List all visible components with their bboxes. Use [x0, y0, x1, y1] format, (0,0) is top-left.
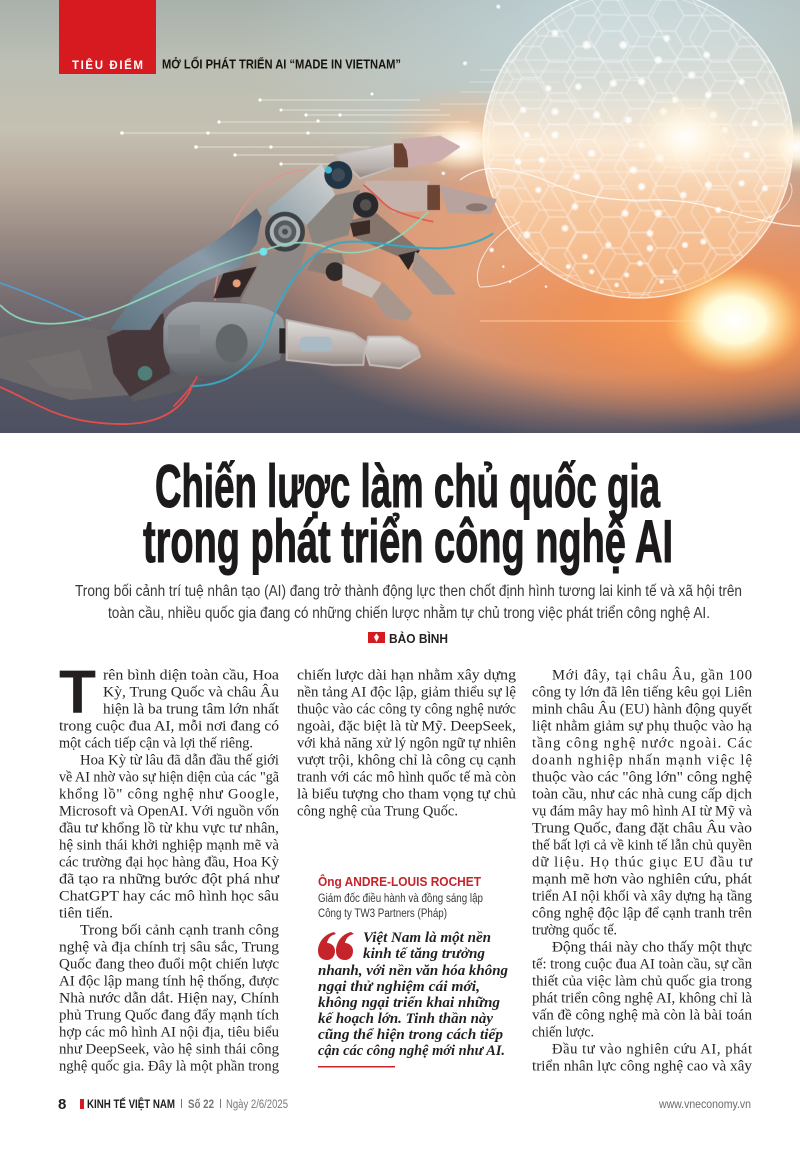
icon: quotation marks — [318, 932, 354, 960]
article column 1: khổng lồ" công nghệ như Google, — [59, 786, 279, 802]
article column 2: nền tảng AI độc lập, giảm thiểu sự lệ — [297, 684, 516, 700]
article column 1: AI độc lập mang tính hệ thống, được — [59, 974, 280, 990]
article column 3: tầng công nghệ nước ngoài. Các — [532, 736, 753, 752]
article column 1: đã tạo ra những bước đột phá như — [59, 872, 280, 888]
article column 3: mạnh mẽ hơn vào nghiên cứu, phát — [532, 872, 752, 888]
article column 3: vụ đám mây hay mô hình AI từ Mỹ và — [532, 804, 753, 820]
pull quote: Andre-Louis Rochet — [318, 874, 508, 1068]
article column 2: vượt trội, không chỉ là công cụ cạnh — [297, 752, 517, 768]
palm connector — [307, 190, 360, 245]
byline: BẢO BÌNH — [389, 631, 448, 646]
article column 3: Động thái này cho thấy một thực — [552, 940, 753, 956]
article column 1: Nhà nước dẫn dắt. Hiện nay, Chính — [59, 990, 280, 1006]
article column 3: công nghệ độc lập để cạnh tranh trên — [532, 906, 753, 922]
article column 2 — [297, 668, 517, 820]
issue number: Số 22 — [188, 1099, 214, 1111]
digital sphere — [441, 0, 800, 305]
article column 2: ngoài, đặc biệt là từ Mỹ. DeepSeek, — [297, 718, 516, 734]
quote text: cũng thể hiện trong cách tiếp — [318, 1027, 503, 1043]
standfirst: toàn cầu, nhiều quốc gia đang có những chiến lược nhằm tự chủ trong việc phát triển công nghệ AI. — [108, 605, 710, 622]
circuit lines leading to the sphere — [122, 70, 560, 164]
issue date: Ngày 2/6/2025 — [226, 1099, 288, 1111]
article column 2: thuộc vào các công ty công nghệ nước — [297, 702, 517, 718]
background wires — [0, 170, 306, 424]
quote text: kế hoạch lớn. Tinh thần này — [318, 1011, 493, 1027]
article column 2: với khả năng xử lý ngôn ngữ tự nhiên — [297, 736, 517, 752]
article column 3: tế: trong cuộc đua AI toàn cầu, sự cần — [532, 956, 753, 972]
speaker role: Giám đốc điều hành và đồng sáng lập — [318, 893, 483, 905]
article column 3 — [532, 666, 753, 1074]
quote text — [318, 930, 508, 1059]
article column 3: toàn cầu, như các nhà cung cấp dịch — [532, 786, 753, 802]
article column 1: ChatGPT hay các mô hình học sâu — [59, 888, 280, 904]
thumb — [130, 376, 196, 401]
article column 1: về AI nhờ vào sự hiện diện của các "gã — [59, 770, 280, 786]
light glows and sun — [416, 95, 800, 375]
footer — [58, 1096, 751, 1113]
article column 1: các trường đại học hàng đầu, Hoa Kỳ — [59, 854, 280, 870]
quote text: cận các công nghệ mới như AI. — [318, 1043, 505, 1059]
headline — [143, 453, 673, 575]
article column 2: công nghệ của Trung Quốc. — [297, 804, 458, 820]
article column 1: tiên tiến. — [59, 906, 113, 922]
page number: 8 — [58, 1096, 66, 1113]
article column 1: Kỳ, Trung Quốc và châu Âu — [103, 684, 280, 700]
blue wire — [190, 233, 493, 386]
green wire — [0, 212, 428, 324]
article column 1: nghệ quốc gia. Đây là một phần trong — [59, 1058, 280, 1074]
article column 1: hợp các mô hình AI nội địa, tiêu biểu — [59, 1024, 280, 1040]
article column 3: doanh nghiệp nhấn mạnh việc lệ — [532, 752, 752, 768]
article column 3: dữ liệu. Họ thúc giục EU đầu tư — [532, 854, 753, 870]
article column 3: thiết của việc làm chủ quốc gia trong — [532, 974, 753, 990]
speaker role: Công ty TW3 Partners (Pháp) — [318, 908, 447, 920]
standfirst — [75, 583, 742, 622]
article column 1: một cách tiếp cận và lợi thế riêng. — [59, 736, 253, 752]
article column 3: minh châu Âu (EU) hành động quyết — [532, 700, 752, 718]
article column 3: vấn đề công nghệ mà còn là bài toán — [532, 1008, 753, 1024]
article column 1: Microsoft và OpenAI. Với nguồn vốn — [59, 804, 280, 820]
article column 3: Mới đây, tại châu Âu, gần 100 — [552, 666, 752, 684]
ring finger — [352, 213, 420, 257]
article column 3: Trung Quốc, đang đặt châu Âu vào — [532, 820, 752, 836]
article column 1: rên bình diện toàn cầu, Hoa — [103, 668, 280, 684]
quote text: ngại thử nghiệm cái mới, — [318, 979, 480, 995]
website: www.vneconomy.vn — [658, 1099, 751, 1111]
speaker role — [318, 893, 483, 920]
article column 1: như DeepSeek, vào hệ sinh thái công — [59, 1042, 280, 1058]
back of the palm — [110, 208, 262, 330]
article column 3: công ty lớn đã lên tiếng kêu gọi Liên — [532, 684, 753, 700]
section tag: TIÊU ĐIỂM — [59, 0, 156, 74]
article column 2: là biểu tượng cho tham vọng tự chủ — [297, 786, 517, 802]
hero photo: robot hand touching digital sphere — [0, 0, 800, 440]
article column 2: tranh với các mô hình quốc tế mà còn — [297, 770, 517, 786]
article column 1: hiện là ba trung tâm lớn nhất — [103, 702, 279, 718]
publication name: KINH TẾ VIỆT NAM — [87, 1098, 175, 1111]
quote text: nhanh, với nền văn hóa không — [318, 963, 508, 979]
quote text: không ngại triển khai những — [318, 995, 501, 1011]
index finger — [268, 163, 335, 225]
byline — [368, 631, 448, 646]
article column 1: Quốc đang theo đuổi một chiến lược — [59, 956, 280, 972]
speaker name: Ông ANDRE-LOUIS ROCHET — [318, 874, 481, 889]
main knuckle — [265, 212, 305, 252]
section tag: TIÊU ĐIỂM: TIÊU ĐIỂM — [72, 59, 143, 72]
index knuckle — [324, 161, 352, 189]
middle finger — [363, 182, 428, 212]
article column 3: liệt nhằm giảm sự phụ thuộc vào hạ — [532, 718, 753, 734]
article column 3: triển AI nội khối và xây dựng hạ tầng — [532, 888, 753, 904]
article column 1: Hoa Kỳ từ lâu đã dẫn đầu thế giới — [80, 752, 279, 768]
robot hand — [0, 137, 495, 407]
article column 3: triển nhân lực công nghệ cao và xây — [532, 1058, 753, 1074]
article column 1: hệ sinh thái khởi nghiệp mạnh mẽ và — [59, 838, 280, 854]
article column 1: Trong bối cảnh cạnh tranh công — [80, 922, 280, 938]
article column 1: trong cuộc đua AI, mỗi nơi đang có — [59, 718, 279, 734]
article column 3: chiến lược. — [532, 1024, 594, 1040]
forearm — [0, 338, 129, 400]
article column 3: Đầu tư vào nghiên cứu AI, phát — [552, 1042, 752, 1058]
article column 3: phát triển công nghệ AI, không chỉ là — [532, 990, 753, 1006]
article column 3: trường quốc tế. — [532, 922, 617, 938]
article column 1 — [59, 658, 280, 1074]
article column 1: đầu tư khổng lồ từ khu vực tư nhân, — [59, 820, 279, 836]
little finger — [307, 253, 345, 275]
article column 3: thế bất lợi cả về kinh tế lẫn chủ quyền — [532, 838, 753, 854]
article column 3: thuộc vào các "ông lớn" công nghệ — [532, 770, 752, 786]
article column 1: phủ Trung Quốc đang đẩy mạnh tích — [59, 1008, 280, 1024]
drop cap: T — [59, 658, 96, 726]
red wire over fingers — [363, 185, 433, 222]
section title: MỞ LỐI PHÁT TRIỂN AI “MADE IN VIETNAM” — [162, 56, 401, 72]
quote text: kinh tế tăng trưởng — [363, 946, 485, 962]
article column 1: nghệ và địa chính trị sâu sắc, Trung — [59, 940, 280, 956]
quote text: Việt Nam là một nền — [363, 930, 491, 946]
article column 2: chiến lược dài hạn nhằm xây dựng — [297, 668, 517, 684]
